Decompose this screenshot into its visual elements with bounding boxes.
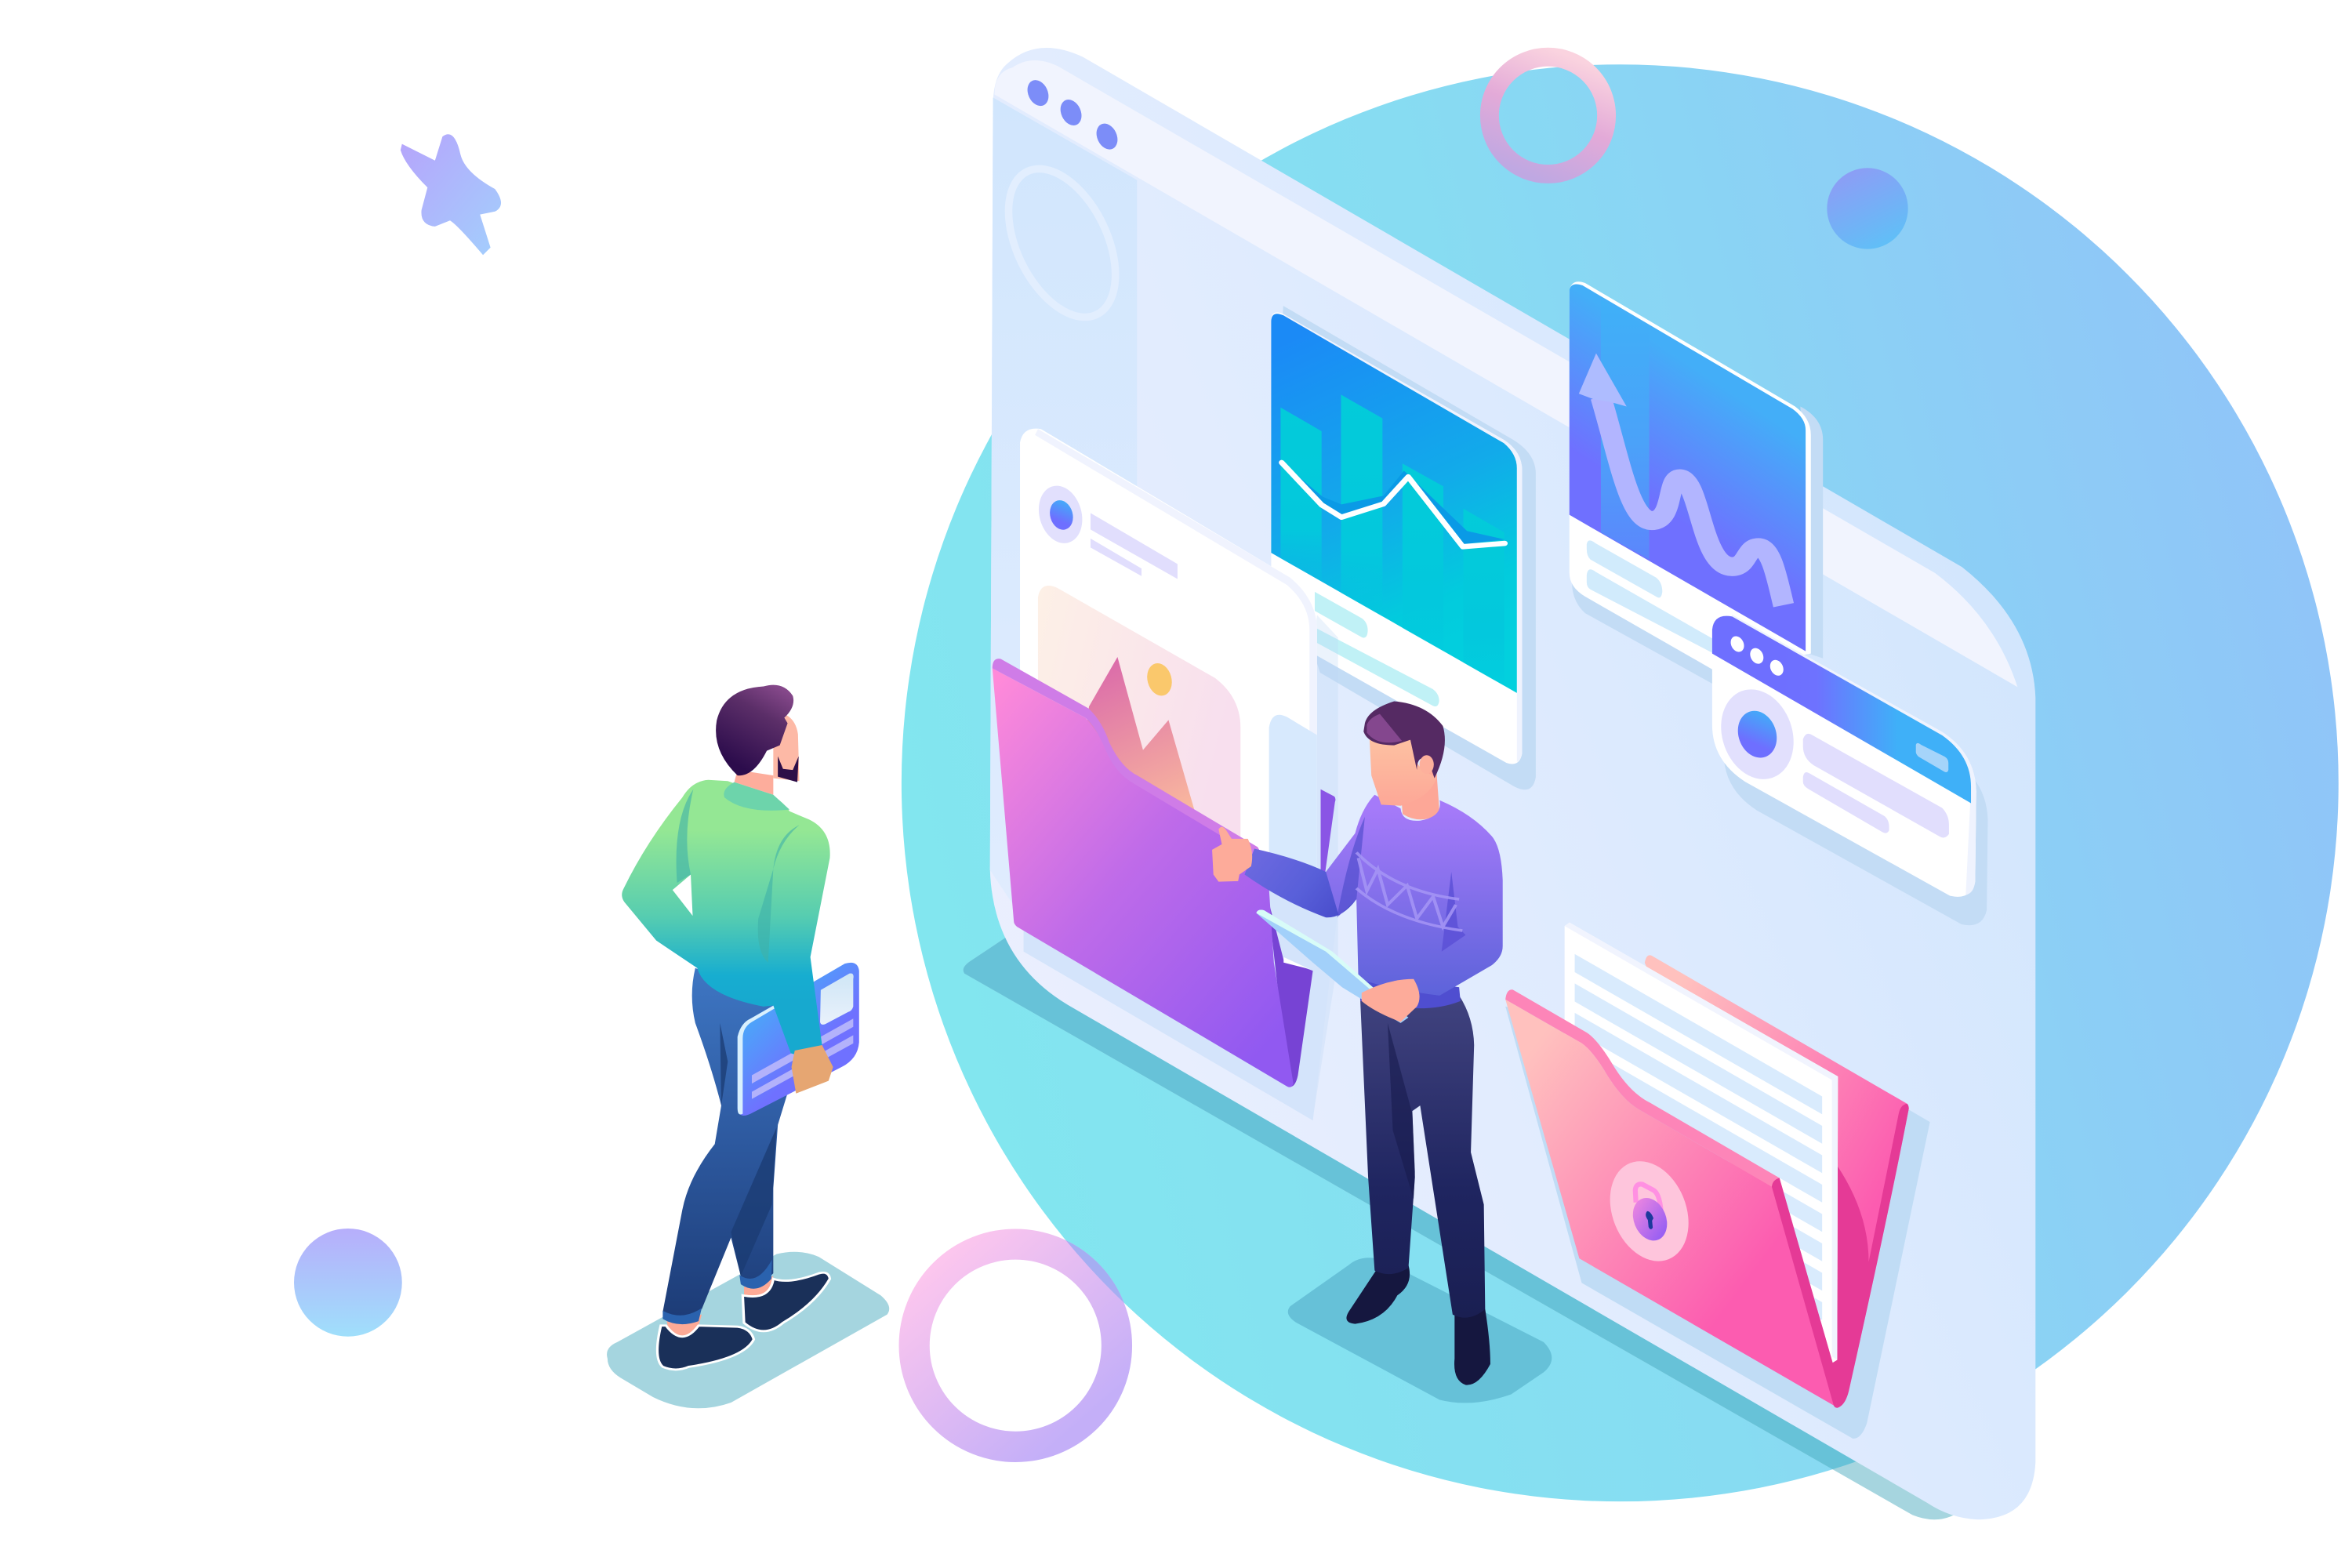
shoes [657,1272,829,1370]
window sidebar [990,97,1137,915]
sleeve gap [673,874,693,916]
folder front [993,668,1294,1087]
right hand [1362,979,1420,1022]
folder tab edge [993,659,1268,863]
pointing hand [1212,827,1252,882]
profile text lines [1803,734,1949,837]
floor shadow of panel [964,933,1965,1519]
sweater [1326,795,1503,996]
line series [1282,463,1504,546]
upper cards group [1271,281,1987,925]
standing man with purple sweater [1212,701,1552,1403]
neck [1401,770,1439,819]
ankles [666,1276,773,1341]
decorative star [401,134,501,255]
small profile window [1711,614,1987,925]
folder shadow [1024,863,1339,1120]
jeans cuffs [662,1260,772,1324]
paper sheet [1565,923,1838,1363]
icon: padlock [1595,1149,1703,1273]
folder fold edge [1772,1178,1837,1408]
white image card [1020,429,1338,1120]
decorative dot top right [1827,168,1908,249]
neck [735,770,773,795]
folder inner dark [1832,1104,1909,1408]
decorative dot left [294,1229,402,1337]
teal chart card [1271,306,1536,789]
card text lines [1091,513,1178,579]
tablet [738,963,859,1116]
picture thumbnail [1038,586,1240,840]
sweater [622,780,830,1054]
pink folder [1505,923,1930,1439]
card labels [1587,540,1662,597]
background circle [902,64,2339,1501]
line series shadow [1286,466,1504,544]
profile avatar [1711,682,1804,786]
hair [1363,701,1445,779]
window top bar [994,60,2017,687]
folder back [1645,955,1909,1408]
folder front [1505,1000,1834,1406]
card avatar [1033,481,1089,548]
blue arrow chart card [1570,281,1823,684]
sweater pattern [1356,852,1462,931]
browser window panel [987,48,2035,1519]
rising curve [1601,397,1784,605]
bars [1280,408,1322,582]
window dots [1023,77,1122,153]
ground shadow [1288,1258,1552,1403]
trousers [1360,996,1485,1318]
hair [716,685,793,775]
pointing arm [1245,848,1356,917]
folder back [1321,789,1335,891]
curve arrowhead [1579,354,1627,407]
decorative ring bottom [914,1244,1116,1446]
folder shadow [1505,1007,1930,1439]
card labels [1315,592,1368,637]
translucent sheet [1269,715,1317,975]
decorative ring top [1490,57,1606,174]
hand [792,1045,833,1094]
sleeve fold [1442,872,1465,952]
sidebar ring [987,152,1138,334]
ground shadow [607,1252,889,1408]
belt [1359,974,1461,1008]
hair highlight [1367,714,1402,742]
sun [1144,660,1175,699]
shoes [1346,1265,1490,1385]
jeans [662,968,809,1316]
mountains [1080,657,1203,840]
folder tab edge [1505,989,1780,1187]
face [1370,737,1436,806]
head skin [773,715,800,781]
collar [724,782,789,811]
tablet [1256,909,1408,1023]
sweater folds [677,789,800,963]
beard [778,757,799,782]
ear [1420,755,1434,774]
purple folder [993,659,1339,1120]
standing man with green sweater [607,685,889,1408]
